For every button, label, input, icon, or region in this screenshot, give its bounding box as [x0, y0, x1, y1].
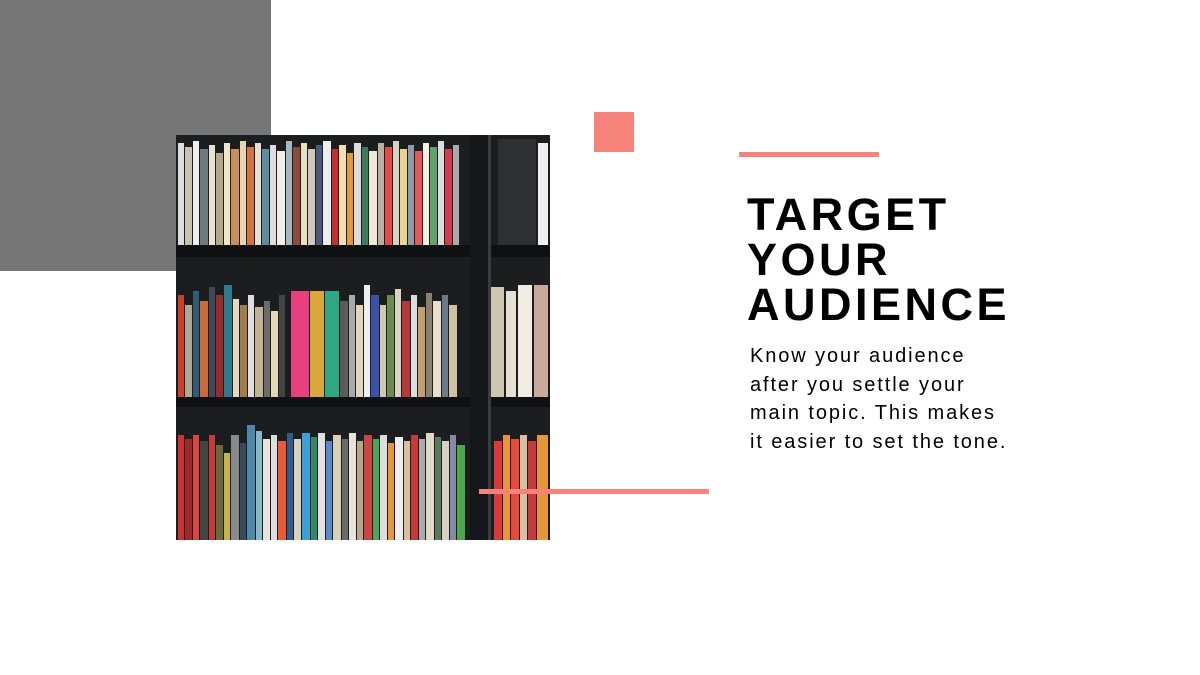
coral line top: [739, 152, 879, 157]
title: [747, 189, 1010, 330]
body text: after you settle your: [750, 374, 966, 396]
title: YOUR: [747, 234, 891, 285]
body text: Know your audience: [750, 345, 965, 367]
title: TARGET: [747, 189, 950, 240]
body text: main topic. This makes: [750, 402, 996, 424]
coral square: [594, 112, 634, 152]
body text: [750, 345, 1007, 452]
gray block: [0, 0, 271, 271]
title: AUDIENCE: [747, 279, 1010, 330]
coral line bottom: [479, 489, 709, 494]
body text: it easier to set the tone.: [750, 430, 1007, 452]
photo: bookshelf: [176, 135, 550, 540]
